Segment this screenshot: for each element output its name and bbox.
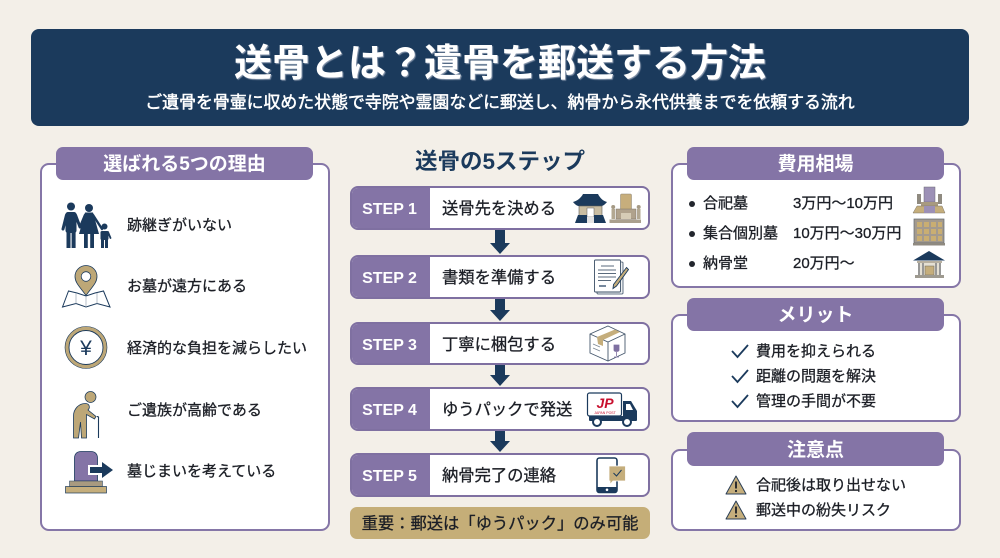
panel: five steps [350, 149, 650, 539]
arrow 3 [490, 365, 510, 386]
step 1 [350, 186, 650, 230]
panel: merits [671, 298, 961, 422]
arrow 1 [490, 230, 510, 254]
subtitle: ご遺骨を骨壷に収めた状態で寺院や霊園などに郵送し、納骨から永代供養までを依頼する流れ [145, 93, 855, 112]
text: reason 1: 跡継ぎがいない [127, 217, 232, 234]
cost row 1 [689, 195, 893, 212]
icon: family [62, 202, 112, 248]
icon: documents and pen [594, 260, 629, 294]
callout: important note [350, 507, 650, 539]
icon: elderly person with cane [73, 391, 100, 438]
icon: parcel [590, 326, 626, 362]
panel heading: merits: メリット [777, 305, 854, 326]
cost row 3: 20万円〜 [793, 255, 855, 272]
panel heading: merits [687, 298, 944, 331]
cost row 3: 納骨堂 [703, 255, 748, 272]
icon: smartphone message [596, 457, 626, 494]
cost row 3 [689, 255, 855, 272]
arrow 2 [490, 299, 510, 321]
icon: map pin [62, 265, 111, 308]
merit 1: 費用を抑えられる [756, 343, 876, 360]
caution 1: 合祀後は取り出せない [756, 477, 906, 494]
text: reason 2: お墓が遠方にある [127, 278, 247, 295]
arrow 4 [490, 431, 510, 452]
panel: reasons [40, 147, 330, 531]
text: reason 3: 経済的な負担を減らしたい [127, 340, 307, 357]
icon: columbarium building [913, 218, 945, 246]
icon: delivery truck: JAPAN POST [594, 411, 617, 415]
icon: yen coin [64, 326, 108, 369]
step 2 [350, 255, 650, 299]
panel heading: cost: 費用相場 [777, 154, 854, 175]
step 5 [350, 453, 650, 497]
text: reason 5: 墓じまいを考えている [127, 463, 276, 480]
step 3: STEP 3 [362, 337, 417, 354]
cost row 2: 集合個別墓 [703, 225, 778, 242]
step 4: ゆうパックで発送 [442, 401, 572, 419]
step 4 [350, 387, 650, 431]
step 5: STEP 5 [362, 468, 417, 485]
icon: communal tomb [912, 186, 946, 214]
step 1: STEP 1 [362, 201, 417, 218]
cost row 2: 10万円〜30万円 [793, 225, 901, 242]
text: reason 4: ご遺族が高齢である [127, 402, 262, 419]
merit 2: 距離の問題を解決 [756, 368, 876, 385]
step 1: 送骨先を決める [442, 200, 556, 218]
step 3: 丁寧に梱包する [442, 336, 556, 354]
icon: ossuary hall [913, 251, 945, 278]
step 3 [350, 322, 650, 365]
panel: cost [671, 147, 961, 288]
panel: cautions [671, 432, 961, 531]
icon: delivery truck [586, 392, 637, 427]
heading: steps: 送骨の5ステップ [415, 149, 585, 174]
icon: delivery truck: JP [596, 395, 614, 411]
panel heading: reasons [56, 147, 313, 180]
step 4: STEP 4 [362, 402, 417, 419]
cost row 1: 合祀墓 [703, 195, 748, 212]
icon: graveyard [610, 194, 641, 223]
panel heading: cost [687, 147, 944, 180]
icon: gravestone with arrow [65, 451, 113, 494]
title: 送骨とは？遺骨を郵送する方法 [234, 43, 766, 85]
panel heading: cautions [687, 432, 944, 466]
cost row 2 [689, 225, 901, 242]
step 2: STEP 2 [362, 270, 417, 287]
icon: temple [573, 194, 607, 223]
panel heading: reasons: 選ばれる5つの理由 [103, 154, 266, 175]
caution 2: 郵送中の紛失リスク [756, 502, 891, 519]
callout: important note: 重要：郵送は「ゆうパック」のみ可能 [362, 515, 638, 533]
header banner [31, 29, 969, 126]
step 2: 書類を準備する [442, 269, 556, 287]
step 5: 納骨完了の連絡 [442, 467, 556, 485]
merit 3: 管理の手間が不要 [756, 393, 876, 410]
panel heading: cautions: 注意点 [787, 440, 844, 461]
icon: yen coin: ¥ [79, 337, 92, 360]
cost row 1: 3万円〜10万円 [793, 195, 893, 212]
